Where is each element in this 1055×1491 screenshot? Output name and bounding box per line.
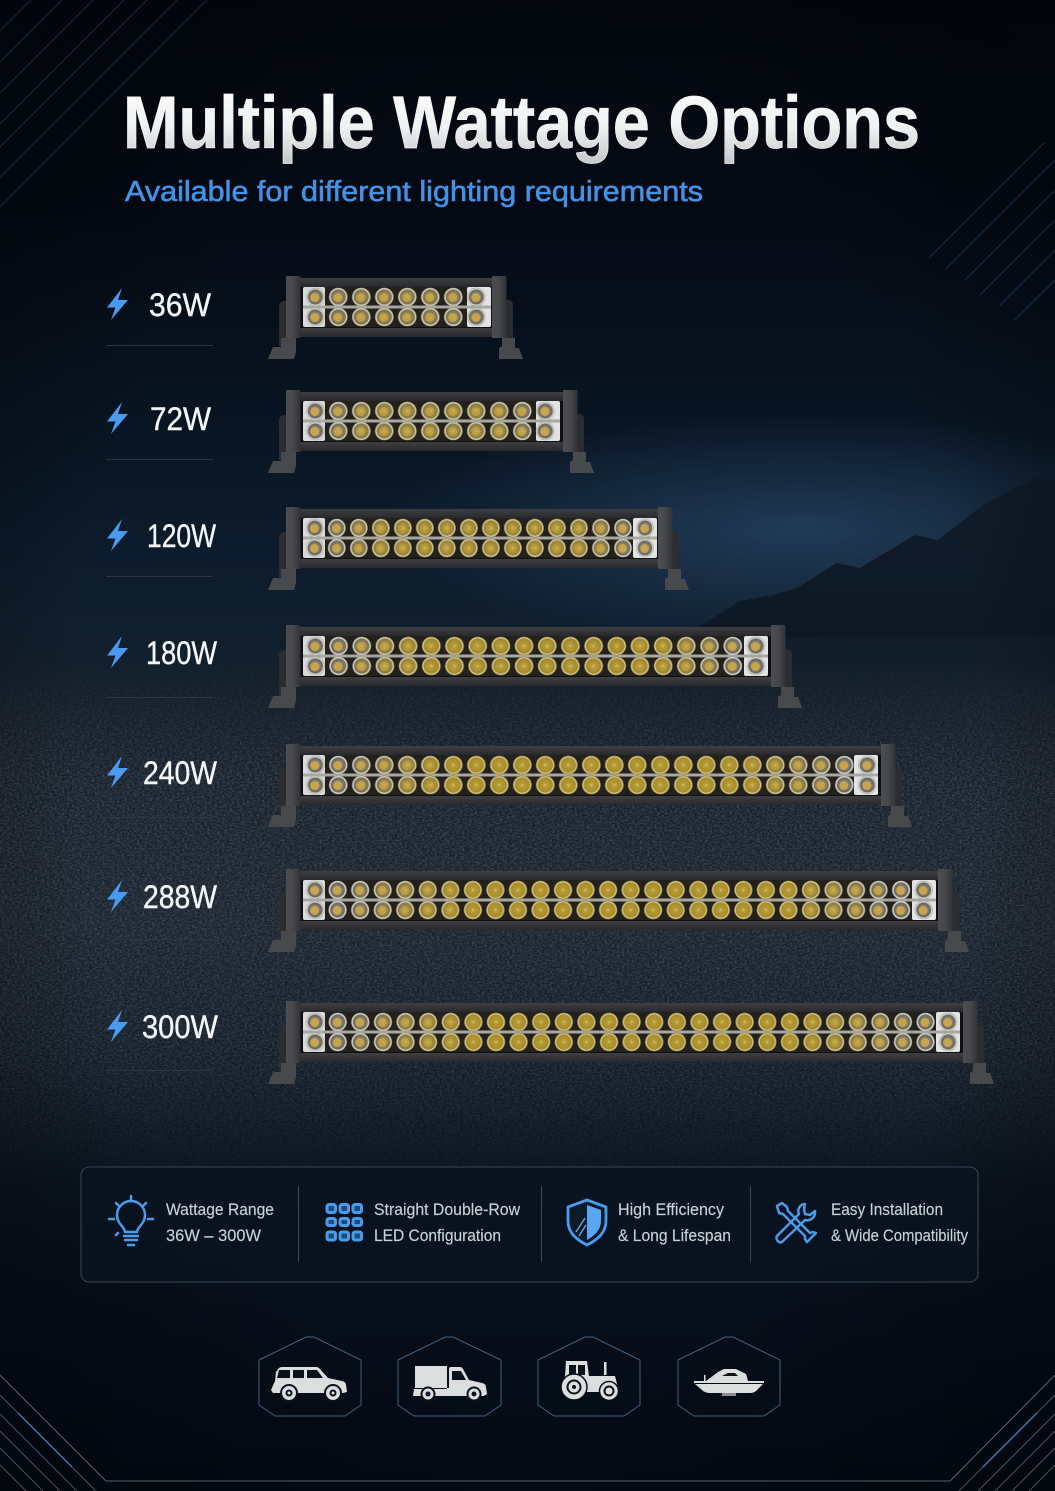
corner line decoration: bottom frame [0,1375,1055,1491]
wattage value: 300W [142,1009,219,1045]
corner line decoration: top right [930,143,1055,320]
row label: 72W [106,401,213,460]
icon: bolt [107,519,128,551]
wattage value: 288W [143,879,218,915]
row label: 288W [106,879,218,940]
badge: truck [398,1337,501,1416]
background scene [0,0,1055,1187]
icon: LED grid [327,1204,362,1240]
icon: bolt [107,636,128,668]
text: LED configuration: LED Configuration [374,1226,501,1245]
row label: 36W [106,287,213,346]
icon: bolt [107,1010,128,1042]
icon: boat [694,1369,764,1396]
text: efficiency: & Long Lifespan [618,1226,731,1245]
icon: bolt [107,880,128,912]
light bar: 120W [268,507,689,590]
row label: 240W [106,755,218,818]
text: wattage range: Wattage Range [166,1200,274,1219]
subtitle: Available for different lighting requirements [125,176,703,208]
text: installation: & Wide Compatibility [831,1226,968,1245]
light bar: 300W [268,1001,994,1084]
icon: SUV [271,1367,347,1401]
badge: boat [678,1337,780,1416]
icon: light bulb [109,1196,153,1245]
icon: tractor [561,1361,618,1400]
text: wattage range [166,1200,274,1245]
light bar: 240W [268,744,912,827]
text: efficiency [618,1200,731,1245]
title: Multiple Wattage Options [123,81,920,164]
icon: bolt [107,756,128,788]
text: installation [831,1200,968,1245]
text: wattage range: 36W – 300W [166,1226,261,1245]
icon: bolt [107,402,128,434]
row label: 180W [106,635,218,698]
wattage value: 36W [149,287,212,323]
icon: tools [776,1203,816,1242]
panel: feature strip [81,1167,978,1282]
text: efficiency: High Efficiency [618,1200,724,1219]
badge: SUV [259,1337,361,1416]
icon: shield [568,1200,606,1245]
wattage value: 120W [147,518,217,554]
icon: bolt [107,288,128,320]
light bar: 72W [268,390,594,473]
light bar: 288W [268,869,969,952]
text: LED configuration: Straight Double-Row [374,1200,521,1219]
icon: truck [413,1366,487,1400]
wattage value: 180W [146,635,218,671]
text: installation: Easy Installation [831,1200,943,1219]
row label: 300W [106,1009,219,1071]
badge: tractor [538,1337,640,1416]
wattage value: 240W [143,755,218,791]
wattage value: 72W [150,401,212,437]
light bar: 36W [268,276,523,359]
row label: 120W [106,518,217,577]
text: LED configuration [374,1200,521,1245]
corner line decoration: top left [0,0,207,207]
light bar: 180W [268,625,802,708]
